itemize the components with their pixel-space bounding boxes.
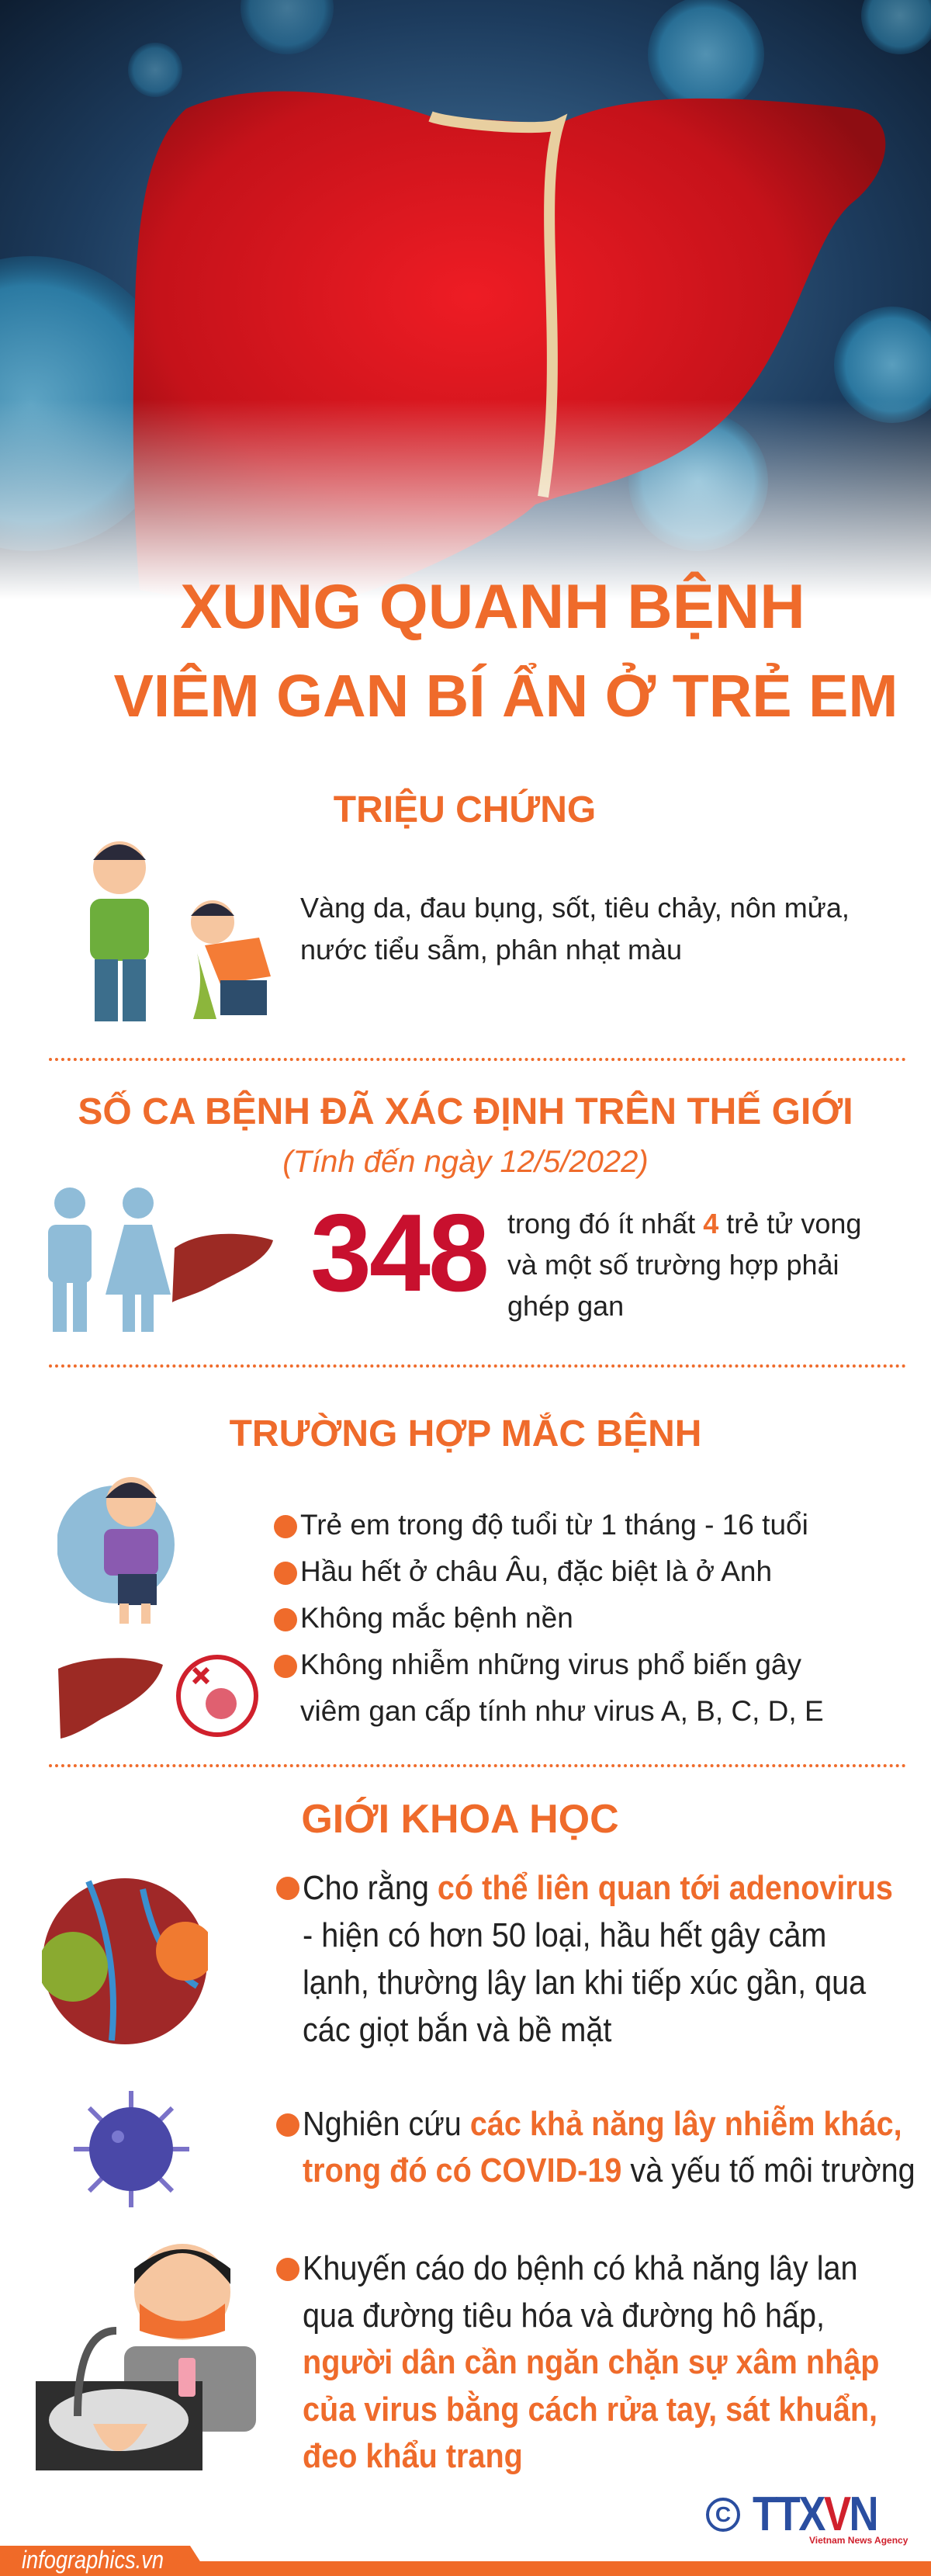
number: 348: 348 [310,1191,487,1315]
text: deaths: ghép gan [507,1290,624,1322]
text: symptoms: nước tiểu sẫm, phân nhạt màu [300,934,682,966]
heading: number of cases: SỐ CA BỆNH ĐÃ XÁC ĐỊNH TRÊN THẾ GIỚI [78,1091,853,1132]
logo: TTXVN: C [715,2502,731,2526]
list: case characteristics: Trẻ em trong độ tuổi từ 1 tháng - 16 tuổi [300,1509,808,1541]
title: VIÊM GAN BÍ ẨN Ở TRẺ EM [113,663,898,730]
heading: cases profile: TRƯỜNG HỢP MẮC BỆNH [230,1413,701,1454]
icon: purple virus [74,2091,189,2207]
list: case characteristics [274,1509,824,1727]
logo: TTXVN: Vietnam News Agency [809,2535,908,2546]
text: adenovirus bullet: - hiện có hơn 50 loại, hầu hết gây cảm [303,1916,826,1954]
icon: sick children [90,841,271,1021]
text: adenovirus bullet: Cho rằng có thể liên quan tới adenovirus [303,1869,893,1907]
text: recommendation bullet: người dân cần ngăn chặn sự xâm nhập [303,2343,879,2381]
list: case characteristics: Không mắc bệnh nền [300,1602,573,1634]
text: adenovirus bullet [276,1869,893,2049]
icon: children and liver [48,1187,273,1332]
text: symptoms [300,892,850,966]
list: case characteristics: Hầu hết ở châu Âu, đặc biệt là ở Anh [300,1555,772,1587]
subtitle: date: (Tính đến ngày 12/5/2022) [282,1145,649,1179]
footer bar [0,2546,931,2576]
icon: boy washing hands with mask [36,2244,256,2470]
icon: sick boy in circle [57,1477,175,1624]
text: deaths: trong đó ít nhất 4 trẻ tử vong [507,1208,861,1239]
icon: adenovirus illustration [42,1878,208,2044]
icon: liver and crossed virus [58,1655,258,1739]
text: adenovirus bullet: lạnh, thường lây lan khi tiếp xúc gần, qua [303,1964,866,2002]
text: deaths [507,1208,861,1322]
heading: symptoms: TRIỆU CHỨNG [334,789,596,830]
text: adenovirus bullet: các giọt bắn và bề mặt [303,2011,611,2049]
text: recommendation bullet: qua đường tiêu hóa và đường hô hấp, [303,2296,825,2335]
logo: TTXVN [706,2488,908,2546]
text: recommendation bullet: đeo khẩu trang [303,2437,523,2475]
text: recommendation bullet: của virus bằng cách rửa tay, sát khuẩn, [303,2391,877,2428]
heading: scientists: GIỚI KHOA HỌC [301,1797,619,1842]
text: deaths: và một số trường hợp phải [507,1249,839,1281]
logo: TTXVN: TTXVN [753,2488,877,2541]
text: symptoms: Vàng da, đau bụng, sốt, tiêu chảy, nôn mửa, [300,892,850,924]
footer bar: infographics.vn [22,2546,164,2574]
hero image: liver with viruses [0,0,931,593]
text: other causes bullet: trong đó có COVID-19 và yếu tố môi trường [303,2151,915,2189]
list: case characteristics: Không nhiễm những virus phổ biến gây [300,1649,801,1680]
title: XUNG QUANH BỆNH [180,572,805,642]
title [113,571,898,730]
list: case characteristics: viêm gan cấp tính như virus A, B, C, D, E [300,1695,824,1727]
text: other causes bullet: Nghiên cứu các khả năng lây nhiễm khác, [303,2105,902,2143]
text: other causes bullet [276,2105,915,2189]
text: recommendation bullet: Khuyến cáo do bệnh có khả năng lây lan [303,2249,858,2287]
text: recommendation bullet [276,2249,879,2475]
